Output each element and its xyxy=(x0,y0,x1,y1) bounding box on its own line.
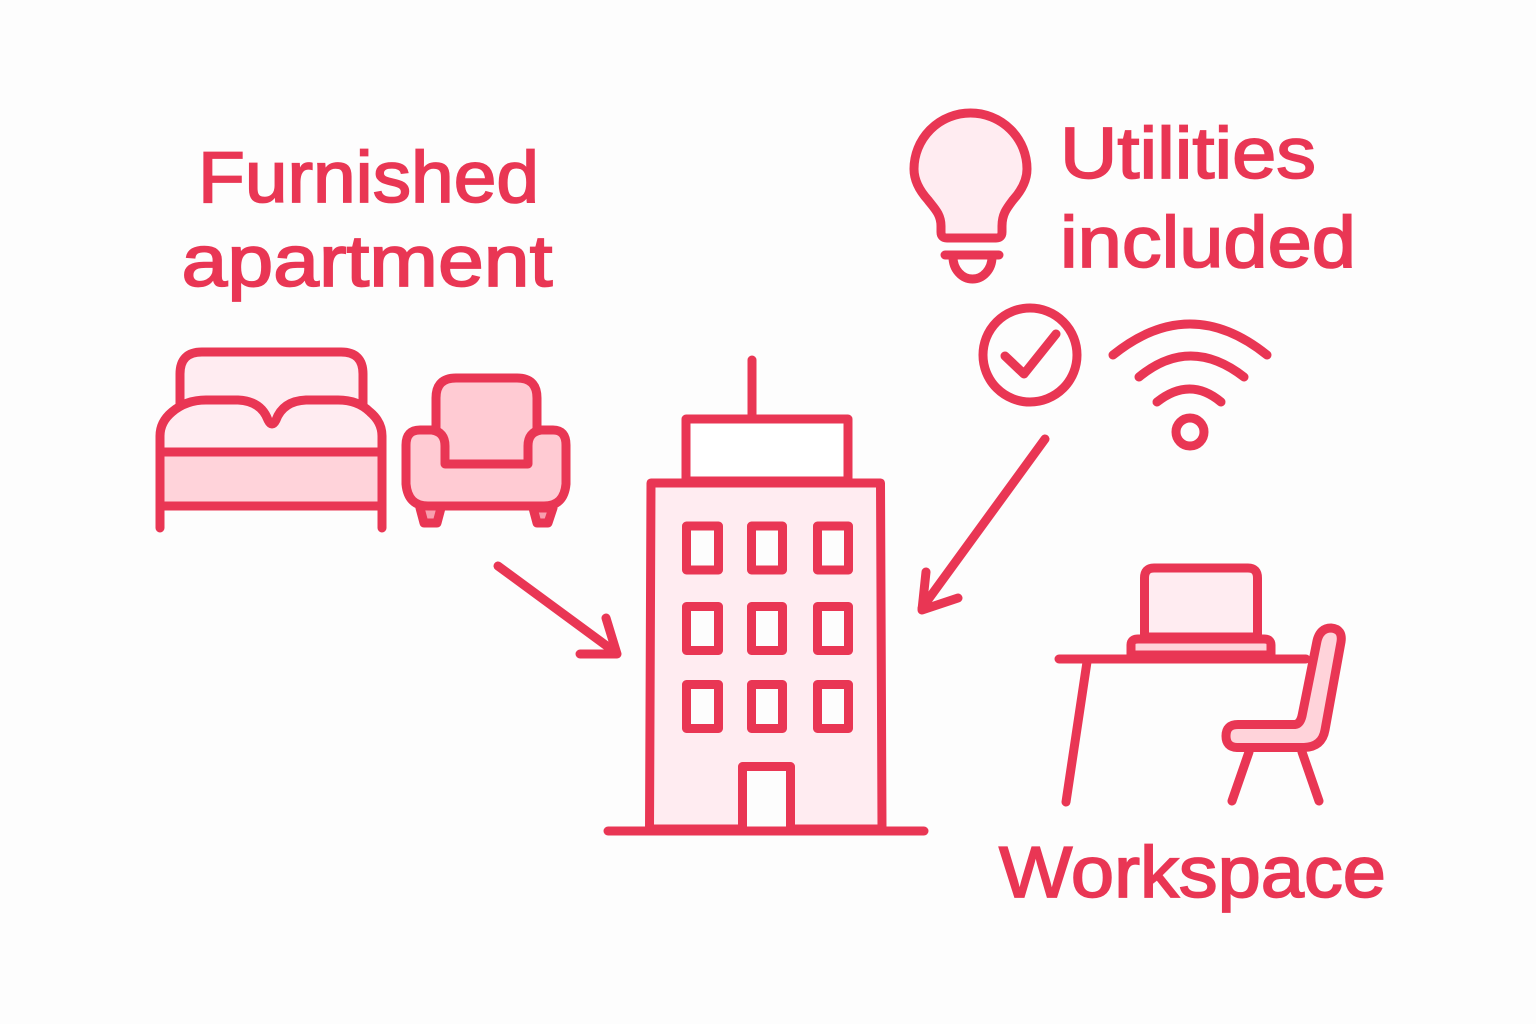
heading: furnished apartment: apartment xyxy=(182,222,552,302)
heading: utilities included: Utilities xyxy=(1060,114,1316,194)
desk xyxy=(1059,659,1306,802)
icon: apartment building xyxy=(608,360,924,831)
arrow: furniture to building xyxy=(498,566,617,654)
laptop xyxy=(1131,568,1271,655)
icon: bed xyxy=(160,352,382,528)
icon: check circle xyxy=(983,308,1077,402)
icon: armchair xyxy=(406,378,566,523)
icon: wifi xyxy=(1113,324,1267,446)
icon: desk with laptop and chair xyxy=(1059,568,1341,802)
heading: workspace: Workspace xyxy=(999,833,1386,913)
heading: furnished apartment xyxy=(182,138,552,302)
icon: light bulb xyxy=(914,113,1027,279)
chair xyxy=(1226,628,1341,801)
heading: utilities included xyxy=(1060,114,1356,283)
heading: utilities included: included xyxy=(1060,203,1356,283)
heading: furnished apartment: Furnished xyxy=(198,138,539,218)
arrow: utilities to building xyxy=(922,439,1045,610)
